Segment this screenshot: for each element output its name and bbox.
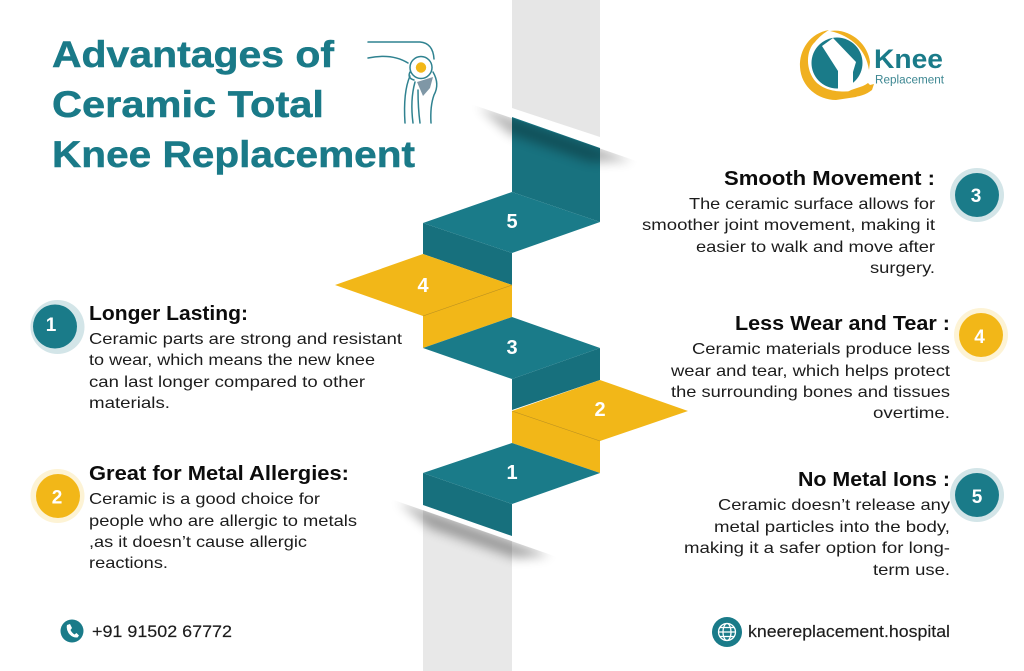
panel: less wear and tear: [670, 308, 1008, 422]
staircase: [335, 117, 688, 536]
icon: knee joint: [368, 42, 437, 123]
panel: no metal ions: making it a safer option for long-: [684, 540, 950, 557]
badge 1: [30, 300, 84, 354]
panel: great for metal allergies: reactions.: [89, 555, 168, 572]
panel: great for metal allergies: Ceramic is a good choice for: [89, 491, 321, 508]
panel: less wear and tear: overtime.: [873, 405, 950, 422]
step 4: 4: [417, 275, 429, 297]
step 4: [335, 254, 512, 348]
step 5: 5: [506, 211, 518, 233]
badge 4: [954, 308, 1008, 362]
badge 3: [950, 168, 1004, 222]
title: Advantages of: [52, 34, 335, 75]
step 3: [423, 317, 600, 410]
panel: smooth movement: [642, 168, 1004, 277]
panel: no metal ions: [684, 468, 1004, 579]
badge 2: 2: [52, 488, 62, 508]
panel: smooth movement: surgery.: [870, 260, 935, 277]
step 2: [512, 380, 688, 473]
panel: less wear and tear: wear and tear, which helps protect: [670, 363, 951, 380]
panel: longer lasting: Ceramic parts are strong and resistant: [89, 331, 403, 348]
panel: less wear and tear: Ceramic materials produce less: [692, 341, 950, 358]
footer: phone: [60, 620, 232, 642]
logo mark: [800, 30, 874, 100]
step 5: [423, 192, 600, 285]
badge 5: 5: [972, 487, 983, 508]
badge 1: 1: [46, 315, 57, 336]
panel: smooth movement: Smooth Movement :: [724, 168, 935, 190]
slash shadow: bottom: [398, 501, 550, 558]
panel: no metal ions: No Metal Ions :: [798, 469, 950, 491]
step 3: 3: [506, 337, 518, 359]
panel: longer lasting: can last longer compared to other: [89, 374, 366, 391]
panel: great for metal allergies: people who are allergic to metals: [89, 513, 357, 530]
panel: less wear and tear: Less Wear and Tear :: [735, 313, 950, 335]
title: Knee Replacement: [52, 134, 415, 175]
panel: longer lasting: Longer Lasting:: [89, 303, 248, 325]
panel: longer lasting: [30, 300, 403, 412]
panel: longer lasting: to wear, which means the new knee: [89, 352, 375, 369]
panel: less wear and tear: the surrounding bones and tissues: [671, 384, 950, 401]
title: [52, 34, 415, 175]
panel: smooth movement: The ceramic surface allows for: [689, 196, 936, 213]
panel: smooth movement: smoother joint movement, making it: [642, 217, 936, 234]
title: Ceramic Total: [52, 84, 324, 125]
footer: website: [712, 617, 950, 647]
background band: bottom grey column: [423, 510, 512, 671]
badge 5: [950, 468, 1004, 522]
badge 3: 3: [971, 186, 981, 207]
panel: great for metal allergies: [30, 463, 357, 572]
icon: globe: [712, 617, 742, 647]
back wall of step 5: [512, 117, 600, 222]
logo: Knee Replacement: Knee: [874, 44, 943, 74]
panel: great for metal allergies: ,as it doesn’t cause allergic: [89, 534, 307, 551]
background band: top grey column: [512, 0, 600, 137]
logo: Knee Replacement: Replacement: [875, 74, 945, 86]
icon: phone: [60, 620, 84, 642]
footer: phone: +91 91502 67772: [92, 622, 232, 641]
badge 2: [30, 469, 84, 523]
step 1: 1: [506, 462, 518, 484]
panel: no metal ions: term use.: [873, 562, 950, 579]
panel: longer lasting: materials.: [89, 395, 170, 412]
step 2: 2: [594, 399, 606, 421]
step 1: [423, 443, 600, 536]
panel: smooth movement: easier to walk and move after: [696, 239, 936, 256]
panel: no metal ions: metal particles into the body,: [714, 519, 950, 536]
footer: website: kneereplacement.hospital: [748, 622, 950, 641]
panel: no metal ions: Ceramic doesn’t release any: [718, 497, 950, 514]
slash shadow: top: [478, 106, 632, 162]
logo: Knee Replacement: [800, 30, 945, 100]
panel: great for metal allergies: Great for Metal Allergies:: [89, 463, 349, 485]
badge 4: 4: [974, 327, 985, 348]
